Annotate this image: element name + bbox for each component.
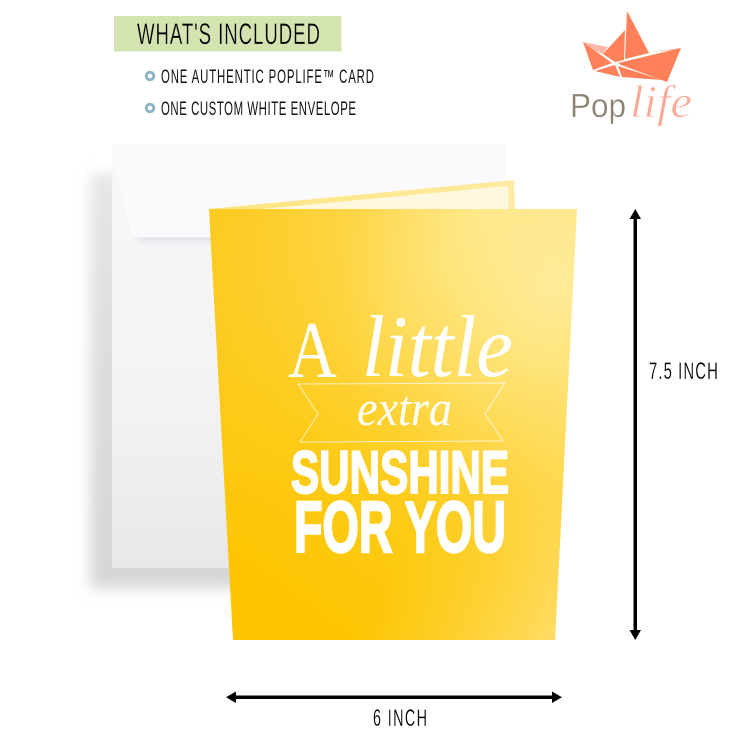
- label: 6 inch: 6 INCH: [373, 705, 427, 732]
- wordmark: life: life: [630, 76, 692, 127]
- envelope shadow: [90, 174, 240, 588]
- envelope body: [112, 145, 505, 568]
- icon: origami boat: [583, 11, 681, 82]
- arrow: height dimension: [630, 209, 641, 640]
- label: 7.5 inch: 7.5 INCH: [649, 359, 718, 385]
- item: authentic card: ONE AUTHENTIC POPLIFE™ CARD: [161, 67, 374, 88]
- arrow: width dimension: [226, 692, 562, 703]
- item: white envelope: ONE CUSTOM WHITE ENVELOPE: [161, 99, 356, 120]
- ribbon banner: [298, 383, 505, 442]
- envelope: [90, 145, 505, 588]
- cut-out text: sunshine: SUNSHINE: [291, 439, 509, 506]
- card back page: [209, 180, 515, 210]
- cut-out text: A little: little: [362, 299, 513, 396]
- cut-out text: A little: A: [288, 307, 337, 395]
- logo: poplife: [570, 11, 692, 127]
- envelope flap: [112, 146, 505, 237]
- cut-out text: A little: [288, 299, 513, 396]
- card: [209, 180, 577, 640]
- card front: [209, 209, 577, 640]
- flap shadow: [138, 237, 505, 241]
- heading: what's included: WHAT'S INCLUDED: [137, 18, 320, 51]
- cut-out text: extra: extra: [357, 380, 452, 436]
- list: included items: [146, 67, 374, 120]
- cut-out text: for you: FOR YOU: [294, 488, 506, 568]
- wordmark: Pop: Pop: [570, 87, 626, 124]
